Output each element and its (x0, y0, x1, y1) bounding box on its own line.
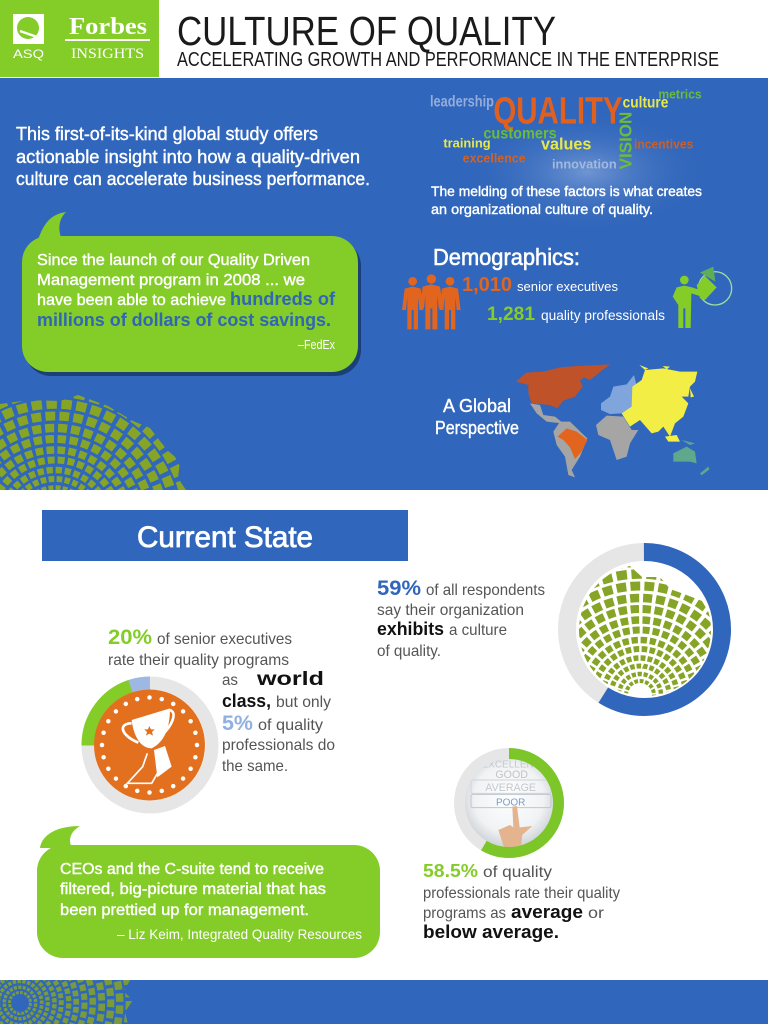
icon: rating buttons and hand (471, 759, 551, 848)
58.5% text: below average. (423, 921, 559, 942)
58.5% text (423, 861, 620, 942)
callout: FedEx quote: millions of dollars of cost savings. (37, 310, 331, 330)
20% text: as (222, 672, 238, 689)
icon: senior executives (402, 274, 461, 329)
icon: rating buttons and hand: AVERAGE (485, 782, 536, 794)
word cloud: QUALITY (493, 90, 623, 132)
donut chart: trophy (72, 667, 228, 823)
20% text: professionals do (222, 737, 335, 754)
Forbes Insights logo (65, 14, 150, 62)
word cloud caption: The melding of these factors is what creates (431, 183, 702, 199)
callout: Liz Keim quote: – Liz Keim, Integrated Quality Resources (117, 927, 362, 942)
callout: FedEx quote (22, 212, 361, 376)
word cloud: metrics (658, 86, 702, 101)
20% text: rate their quality programs (108, 652, 289, 669)
demographics heading: Demographics: (433, 244, 580, 270)
Forbes Insights logo: INSIGHTS (71, 46, 144, 62)
word cloud: leadership (430, 94, 494, 111)
global perspective label (435, 396, 519, 438)
20% text (108, 626, 335, 775)
callout: FedEx quote: Management program in 2008 ... we (37, 272, 305, 289)
callout: FedEx quote: –FedEx (298, 337, 335, 352)
icon: ASQ logo (13, 14, 44, 61)
word cloud: values (541, 134, 591, 153)
58.5% text: of quality (483, 864, 552, 881)
20% text: of senior executives (157, 631, 292, 648)
59% text: a culture (449, 622, 507, 639)
title: CULTURE OF QUALITY (177, 8, 556, 54)
word cloud: incentives (634, 137, 693, 151)
callout: Liz Keim quote: filtered, big-picture material that has (60, 881, 326, 898)
senior executives stat: 1,010 (462, 274, 512, 296)
icon: trophy (123, 708, 174, 783)
intro text (16, 124, 370, 189)
59% text: exhibits (377, 619, 444, 639)
world map (516, 364, 709, 477)
quality professionals stat: 1,281 (487, 304, 535, 325)
Forbes Insights logo: Forbes (69, 14, 147, 40)
20% text: of quality (258, 717, 323, 734)
59% text: 59% (377, 577, 421, 600)
intro text: culture can accelerate business performance. (16, 169, 370, 189)
callout: FedEx quote: have been able to achieve (37, 292, 226, 309)
quality professionals stat: quality professionals (541, 307, 665, 323)
58.5% text: 58.5% (423, 861, 478, 881)
59% text: of quality. (377, 643, 441, 660)
word cloud: culture (623, 94, 668, 111)
icon: presenter with pie chart (673, 267, 732, 328)
header: logo panel (0, 0, 159, 77)
decorative green fan (0, 395, 186, 490)
20% text: world (256, 669, 324, 690)
59% text: say their organization (377, 602, 524, 619)
icon: rating buttons and hand: GOOD (495, 769, 528, 781)
20% text: but only (276, 694, 331, 711)
word cloud: training (443, 136, 491, 151)
58.5% text: programs as (423, 905, 506, 922)
icon: ASQ logo: ASQ (13, 47, 44, 61)
59% text (377, 577, 545, 660)
icon: rating buttons and hand: POOR (496, 797, 525, 808)
global perspective label: Perspective (435, 418, 519, 438)
word cloud (430, 86, 702, 171)
word cloud: excellence (463, 151, 526, 166)
global perspective label: A Global (443, 396, 511, 416)
callout: Liz Keim quote: been prettied up for management. (60, 902, 309, 919)
quality professionals stat (487, 304, 665, 325)
intro text: actionable insight into how a quality-driven (16, 147, 360, 167)
20% text: 5% (222, 712, 253, 735)
section heading: Current State (42, 510, 408, 561)
callout: FedEx quote: Since the launch of our Quality Driven (37, 252, 310, 269)
section heading: Current State: Current State (137, 521, 313, 554)
20% text: 20% (108, 626, 152, 649)
word cloud: VISION (616, 112, 636, 169)
59% text: of all respondents (426, 582, 545, 599)
senior executives stat: senior executives (517, 279, 618, 294)
20% text: the same. (222, 758, 288, 775)
word cloud caption: an organizational culture of quality. (431, 201, 653, 217)
senior executives stat (462, 274, 618, 296)
icon: rating buttons and hand: EXCELLENT (482, 759, 540, 770)
callout: Liz Keim quote: CEOs and the C-suite tend to receive (60, 861, 324, 878)
58.5% text: or (588, 905, 605, 922)
58.5% text: average (511, 901, 583, 922)
footer band (0, 980, 768, 1024)
donut chart: 58.5% (460, 754, 558, 852)
callout: FedEx quote: hundreds of (230, 289, 336, 309)
intro text: This first-of-its-kind global study offers (16, 124, 318, 144)
word cloud: customers (483, 125, 557, 142)
callout: Liz Keim quote (37, 826, 380, 958)
word cloud caption (431, 183, 702, 217)
donut chart: 59% (567, 552, 722, 707)
58.5% text: professionals rate their quality (423, 885, 620, 902)
blue intro panel (0, 78, 768, 490)
word cloud: innovation (552, 156, 617, 171)
20% text: class, (222, 691, 271, 711)
